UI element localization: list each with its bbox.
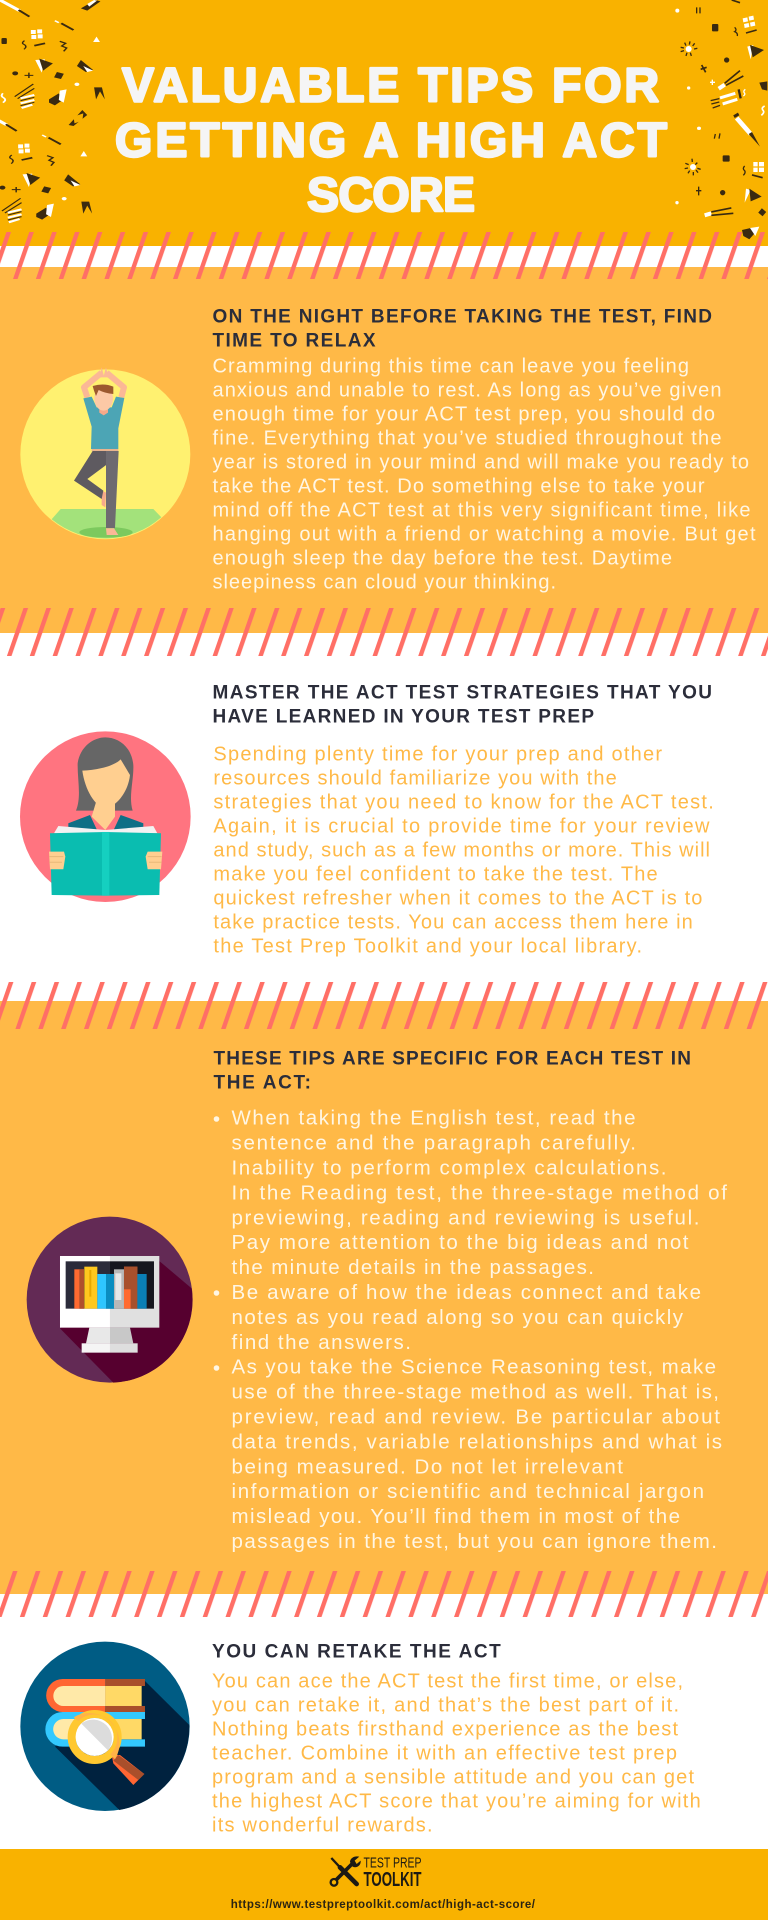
heading: THESE TIPS ARE SPECIFIC FOR EACH TEST IN [214,1048,691,1069]
bullet list: Inability to perform complex calculations. [232,1156,666,1180]
body text: you can retake it, and that’s the best part of it. [212,1694,679,1716]
body text [212,1670,701,1836]
body text: teacher. Combine it with an effective test prep [212,1742,677,1764]
body text [213,744,714,958]
body text: its wonderful rewards. [212,1814,433,1836]
heading: TIME TO RELAX [212,331,376,352]
bullet list: As you take the Science Reasoning test, make [232,1356,716,1379]
body text: take the ACT test. Do something else to take your [212,476,705,498]
bullet list: data trends, variable relationships and what is [232,1430,722,1453]
bullet list: mislead you. You’ll find them in most of the [232,1505,680,1528]
bullet list: Pay more attention to the big ideas and not [232,1231,689,1254]
logo text [364,1855,422,1891]
bullet list: notes as you read along so you can quickly [232,1306,684,1329]
bullet list: preview, read and review. Be particular about [232,1406,720,1428]
body text: mind off the ACT test at this very significant time, like [212,500,750,522]
body text: Spending plenty time for your prep and other [213,744,662,766]
body text: the Test Prep Toolkit and your local library. [213,936,642,958]
title: VALUABLE TIPS FOR [122,60,659,112]
confetti: right [675,0,767,239]
body text: and study, such as a few months or more. This will [213,840,710,862]
body text: fine. Everything that you’ve studied throughout the [212,428,722,450]
heading: HAVE LEARNED IN YOUR TEST PREP [212,706,594,727]
body text [212,356,756,594]
body text: resources should familiarize you with the [213,768,617,790]
bullet list: information or scientific and technical jargon [232,1480,704,1503]
bullet list: find the answers. [232,1331,411,1354]
logo text: TOOLKIT [364,1869,422,1891]
bullet list: Be aware of how the ideas connect and take [232,1281,701,1304]
bullet list: When taking the English test, read the [232,1107,636,1130]
confetti: left [0,0,105,222]
icon: books and magnifying glass [20,1642,190,1811]
heading: MASTER THE ACT TEST STRATEGIES THAT YOU [212,682,712,703]
heading [212,682,712,727]
body text: enough time for your ACT test prep, you should do [212,404,715,426]
panel: relax the night before [0,232,768,633]
title: SCORE [307,169,475,222]
bullet list: use of the three-stage method as well. That is, [232,1381,719,1404]
body text: year is stored in your mind and will make you ready to [212,452,749,474]
body text: enough sleep the day before the test. Daytime [212,548,672,570]
title [115,60,667,222]
footer [0,1849,768,1920]
body text: program and a sensible attitude and you can get [212,1766,694,1788]
body text: sleepiness can cloud your thinking. [212,572,556,594]
heading: ON THE NIGHT BEFORE TAKING THE TEST, FIND [212,306,712,327]
source URL: https://www.testpreptoolkit.com/act/high-act-score/ [231,1899,536,1911]
icon: woman reading a book [20,731,191,902]
bullet list: sentence and the paragraph carefully. [232,1132,636,1155]
body text: Again, it is crucial to provide time for your review [213,816,710,838]
panel: master the strategies [0,608,768,1001]
body text: strategies that you need to know for the ACT test. [213,792,714,814]
body text: make you feel confident to take the test. The [213,864,658,886]
heading: THE ACT: [214,1072,311,1093]
body text: Nothing beats firsthand experience as the best [212,1718,678,1740]
bullet list [214,1107,727,1553]
bullet list: previewing, reading and reviewing is useful. [232,1206,700,1229]
body text: quickest refresher when it comes to the ACT is to [213,888,702,910]
icon: crossed wrench and screwdriver [331,1856,361,1886]
bullet list: the minute details in the passages. [232,1256,594,1279]
body text: hanging out with a friend or watching a movie. But get [212,524,756,546]
panel: tips for each test [0,982,768,1594]
header panel [0,0,768,246]
icon: man in yoga tree pose [20,367,190,539]
body text: anxious and unable to rest. As long as you’ve given [212,380,722,402]
body text: the highest ACT score that you’re aiming for with [212,1790,701,1812]
bullet list: passages in the test, but you can ignore them. [232,1530,717,1553]
icon: computer monitor with books [27,1217,193,1383]
bullet list: In the Reading test, the three-stage method of [232,1181,727,1204]
body text: Cramming during this time can leave you feeling [212,356,689,378]
heading [214,1048,691,1093]
panel: you can retake the ACT [0,1571,768,1849]
body text: take practice tests. You can access them here in [213,912,693,934]
body text: You can ace the ACT test the first time, or else, [212,1670,683,1692]
heading: YOU CAN RETAKE THE ACT [212,1642,501,1663]
bullet list: being measured. Do not let irrelevant [232,1455,623,1478]
title: GETTING A HIGH ACT [115,114,667,168]
logo text: TEST PREP [364,1855,422,1872]
heading [212,306,712,352]
